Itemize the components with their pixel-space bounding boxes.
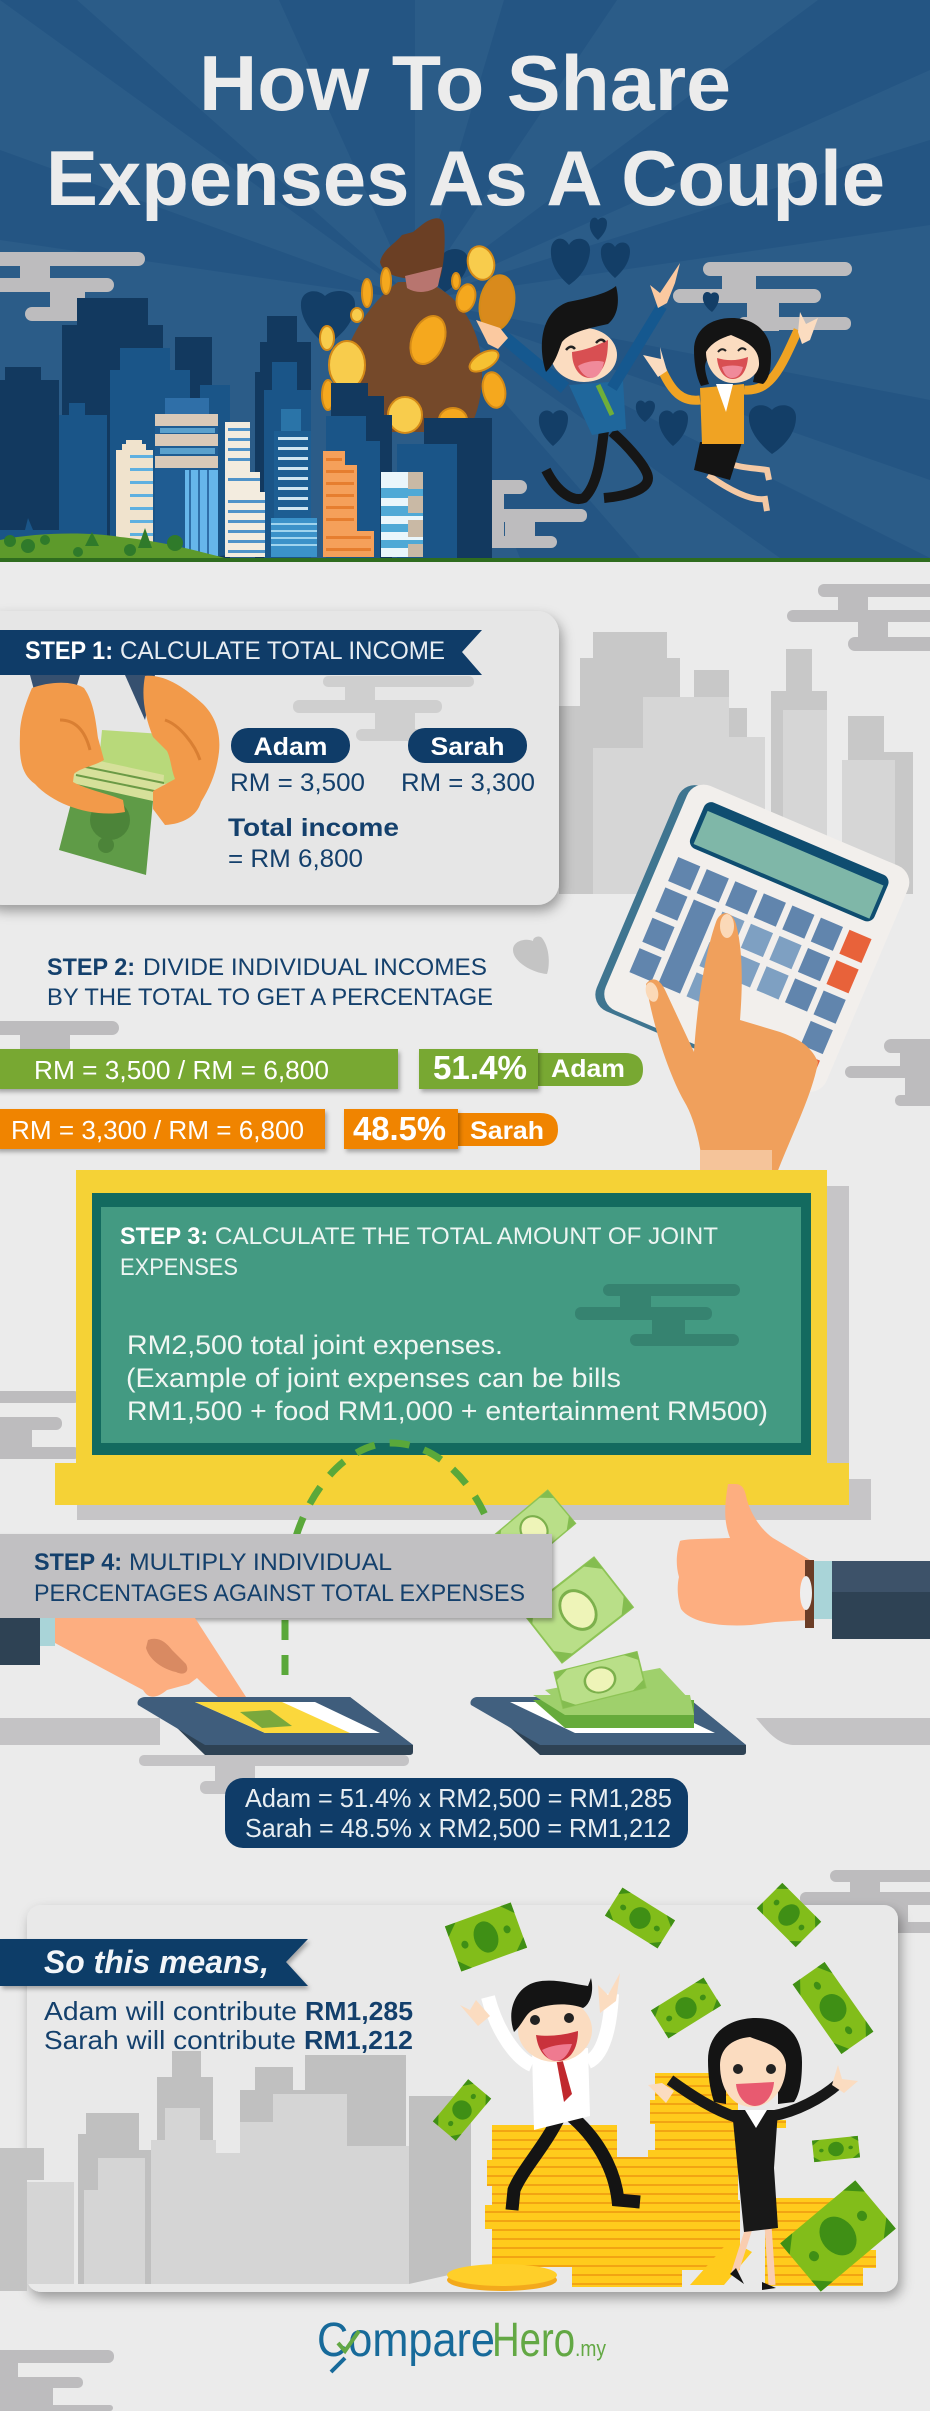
result: Sarah percentage [344,1109,558,1149]
ribbon: so this means [0,1939,308,1986]
calculation box: Sarah = 48.5% x RM2,500 = RM1,212 [245,1813,671,1843]
step 4 panel: PERCENTAGES AGAINST TOTAL EXPENSES [34,1580,525,1607]
bar: Adam division: RM = 3,500 / RM = 6,800 [34,1055,329,1085]
contribution text [44,1996,413,2055]
ribbon: step 1 heading: CALCULATE TOTAL INCOME [120,637,445,665]
step 2 heading: BY THE TOTAL TO GET A PERCENTAGE [47,984,493,1011]
skyline: coloured towers [116,398,423,557]
laptop step 3 [55,1170,871,1520]
step 4 panel: STEP 4: [34,1549,122,1576]
income values: RM = 3,500 [230,769,365,797]
icon: thumbs up hand [677,1484,930,1639]
step 3 body text: RM1,500 + food RM1,000 + entertainment RM500) [127,1396,768,1426]
result: Adam percentage: Adam [551,1055,625,1083]
income values: Total income [228,814,399,842]
step 3 heading: CALCULATE THE TOTAL AMOUNT OF JOINT [215,1223,718,1250]
panel: step 1 [0,611,559,905]
header banner [0,0,930,558]
clouds [0,252,852,548]
green divider line [0,558,930,562]
result: Adam percentage: 51.4% [433,1049,527,1086]
contribution text: Adam will contribute [44,1996,297,2026]
side clouds step 2 [0,1021,930,1106]
lower clouds step 4 [0,1718,930,1794]
man celebrating [460,1973,640,2210]
cloud inside panel [293,676,474,741]
top-right clouds before final panel [800,1870,930,1933]
step 3 body text: (Example of joint expenses can be bills [126,1363,621,1393]
left clouds step 3 [0,1391,80,1459]
bar: Sarah division [0,1109,325,1149]
step 3 heading: EXPENSES [120,1254,238,1281]
hearts [301,218,796,454]
logo: Hero [492,2314,575,2367]
income values [228,769,535,873]
woman celebrating [648,2018,858,2290]
step 4 panel: MULTIPLY INDIVIDUAL [129,1549,392,1576]
bills falling [493,1490,633,1663]
pill: Adam [231,728,350,763]
contribution text: RM1,212 [304,2025,413,2055]
step 3 body text [126,1330,768,1426]
ground with trees [0,528,225,558]
result: Sarah percentage: 48.5% [353,1110,446,1147]
icons: flying bills [433,1883,896,2292]
icon: money bag [320,218,519,433]
step 2 heading: STEP 2: [47,954,135,981]
icon: hand pressing calculator [644,913,818,1181]
icon: left phone [137,1697,413,1755]
calculation box: Adam = 51.4% x RM2,500 = RM1,285 [245,1783,672,1813]
icon: hands holding money [20,675,219,875]
man jumping [476,263,680,499]
skyline: dark and mid blue buildings [0,298,492,558]
step 3 heading [120,1223,718,1281]
bar: Adam division [0,1049,398,1089]
cloud in screen [575,1284,740,1346]
panel: conclusion [0,1883,898,2292]
title: How To Share [199,39,731,127]
logo: Compare [317,2314,495,2367]
contribution text: Sarah will contribute [44,2025,296,2055]
bottom-left cloud [0,2350,114,2411]
logo [317,2314,606,2372]
income values: = RM 6,800 [228,845,363,873]
coin stacks [447,2073,876,2291]
icon: pointing hand [0,1618,257,1714]
ribbon: step 1 heading: STEP 1: [25,637,113,665]
calculation box [225,1778,688,1848]
title: Expenses As A Couple [46,134,885,222]
icon: small heart [513,937,549,974]
woman jumping [643,312,818,511]
step 4 panel [0,1534,552,1618]
contribution text: RM1,285 [305,1996,413,2026]
pill: Adam: Adam [254,733,328,761]
income values: RM = 3,300 [401,769,535,797]
step 2 heading: DIVIDE INDIVIDUAL INCOMES [143,954,487,981]
logo: .my [575,2336,606,2361]
bar: Sarah division: RM = 3,300 / RM = 6,800 [11,1115,304,1145]
step 2 heading [47,954,493,1011]
dashed arc arrow [285,1443,485,1675]
step 3 body text: RM2,500 total joint expenses. [127,1330,503,1360]
ribbon: so this means: So this means, [44,1944,269,1980]
calculator [590,776,915,1101]
result: Adam percentage [419,1049,643,1089]
pill: Sarah: Sarah [430,733,504,761]
icon: right phone with money [470,1652,746,1755]
result: Sarah percentage: Sarah [470,1117,544,1145]
title [46,39,885,222]
ribbon: step 1 heading [0,630,482,675]
step 3 heading: STEP 3: [120,1223,208,1250]
clouds and skyline behind step 1 [559,584,930,894]
pill: Sarah [408,728,527,763]
skyline in panel [0,2051,471,2291]
